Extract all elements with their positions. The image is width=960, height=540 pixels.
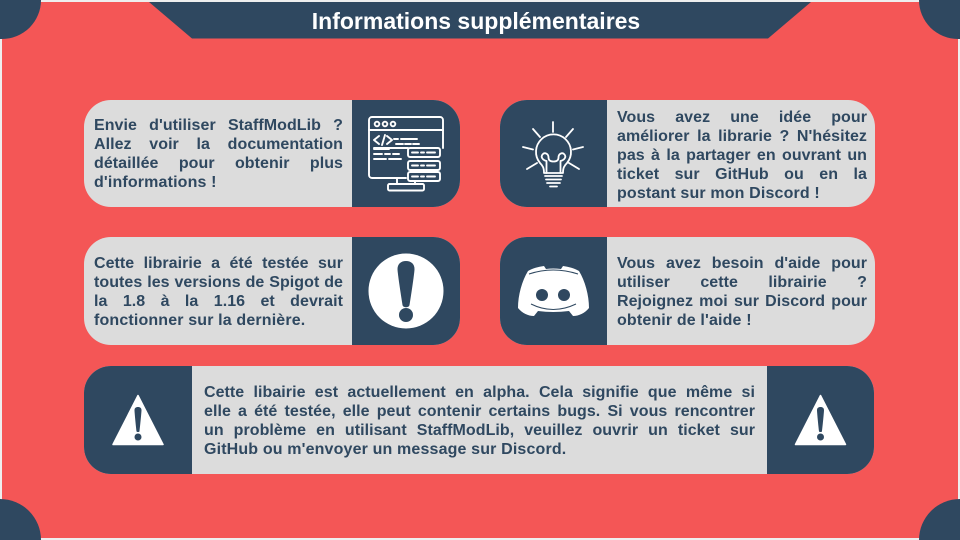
text: elle a été testée, elle peut contenir certains bugs. Si vous rencontrer — [204, 403, 755, 420]
text: ticket sur GitHub ou en la — [617, 166, 867, 183]
panel: discord help — [500, 237, 875, 345]
icon: light bulb — [522, 121, 584, 188]
text: Vous avez besoin d'aide pour — [617, 255, 867, 272]
text: un problème en utilisant StaffModLib, veuillez ouvrir un ticket sur — [204, 422, 755, 439]
panel: alpha warning — [84, 366, 874, 474]
text: toutes les versions de Spigot de — [94, 274, 343, 291]
text: Cette libairie est actuellement en alpha. Cela signifie que même si — [204, 384, 755, 401]
left icon tile — [84, 366, 192, 474]
text: Allez voir la documentation — [94, 136, 343, 153]
text — [94, 117, 343, 191]
icon tile — [500, 237, 607, 345]
panel background — [84, 237, 460, 345]
text — [94, 255, 343, 329]
corner: bottom left — [0, 499, 41, 540]
icon tile — [500, 100, 607, 207]
corner: bottom right — [919, 499, 960, 540]
icon: code window — [368, 116, 444, 192]
icon tile — [352, 100, 460, 207]
text: d'informations ! — [94, 174, 217, 191]
text — [617, 255, 867, 329]
title: Informations supplémentaires — [312, 8, 640, 34]
text: Rejoignez moi sur Discord pour — [617, 293, 867, 310]
panel: documentation — [84, 100, 460, 207]
text: la 1.8 à la 1.16 et devrait — [94, 293, 343, 310]
corner: top left — [0, 0, 41, 39]
text: obtenir de l'aide ! — [617, 312, 752, 329]
icon: warning triangle left — [112, 394, 164, 446]
panel background — [500, 237, 875, 345]
text: Cette librairie a été testée sur — [94, 255, 343, 272]
title banner — [149, 2, 811, 38]
text: détaillée pour obtenir plus — [94, 155, 343, 172]
text: Vous avez une idée pour — [617, 109, 867, 126]
icon: discord logo — [518, 266, 589, 316]
text: GitHub ou m'envoyer un message sur Discord. — [204, 441, 566, 458]
panel background — [500, 100, 875, 207]
text: pas à la partager en ouvrant un — [617, 147, 867, 164]
text — [204, 384, 755, 458]
text: améliorer la librarie ? N'hésitez — [617, 128, 867, 145]
panel background — [84, 100, 460, 207]
text: Envie d'utiliser StaffModLib ? — [94, 117, 343, 134]
icon tile — [352, 237, 460, 345]
text: postant sur mon Discord ! — [617, 185, 820, 202]
right icon tile — [767, 366, 874, 474]
icon: exclamation circle — [368, 254, 444, 328]
icon: warning triangle right — [794, 394, 846, 446]
text — [617, 109, 867, 202]
text: utiliser cette librairie ? — [617, 274, 867, 291]
panel background — [84, 366, 874, 474]
corner: top right — [919, 0, 960, 39]
panel: idea — [500, 100, 875, 207]
text: fonctionner sur la dernière. — [94, 312, 305, 329]
panel: tested versions — [84, 237, 460, 345]
